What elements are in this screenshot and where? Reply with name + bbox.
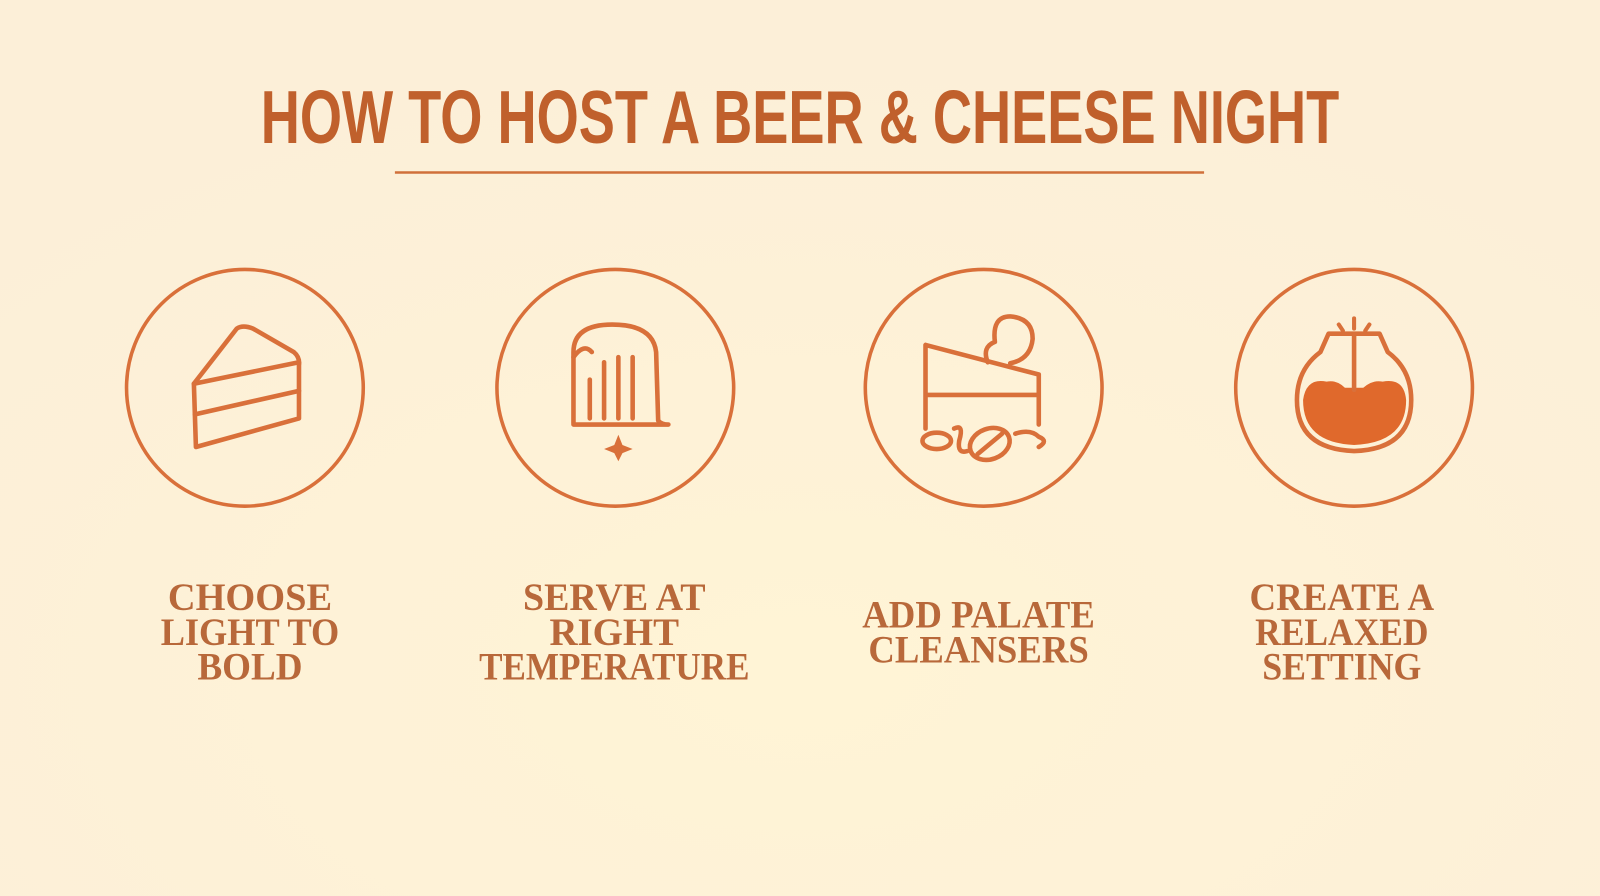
step 1: choose light to bold xyxy=(127,269,363,689)
label 2: RIGHT xyxy=(549,611,679,654)
label 2: TEMPERATURE xyxy=(479,646,749,689)
title underline xyxy=(395,171,1204,174)
icon circle 2 xyxy=(497,269,734,506)
step 4: create a relaxed setting xyxy=(1236,269,1472,689)
label 2: SERVE AT xyxy=(523,576,706,619)
icon: tap glass xyxy=(573,325,668,425)
label 1: CHOOSE xyxy=(168,576,332,619)
label 1: LIGHT TO xyxy=(161,611,339,654)
label 4 xyxy=(1249,576,1434,689)
icon circle 4 xyxy=(1236,269,1472,506)
label 3: ADD PALATE xyxy=(862,594,1095,637)
step 3: add palate cleansers xyxy=(862,269,1102,671)
label 3 xyxy=(862,594,1095,671)
icon: cheese and nuts xyxy=(922,316,1044,465)
icon: sparkle xyxy=(604,435,633,461)
icon circle 3 xyxy=(865,269,1102,506)
step 2: serve at right temperature xyxy=(479,269,749,689)
label 3: CLEANSERS xyxy=(868,628,1089,671)
label 4: RELAXED xyxy=(1255,611,1429,654)
icon: cake slice xyxy=(194,327,299,447)
icon: flask xyxy=(1297,318,1411,451)
label 1: BOLD xyxy=(197,646,303,689)
label 4: CREATE A xyxy=(1249,576,1434,619)
label 1 xyxy=(161,576,339,689)
icon circle 1 xyxy=(127,269,363,506)
label 4: SETTING xyxy=(1262,646,1421,689)
label 2 xyxy=(479,576,749,689)
